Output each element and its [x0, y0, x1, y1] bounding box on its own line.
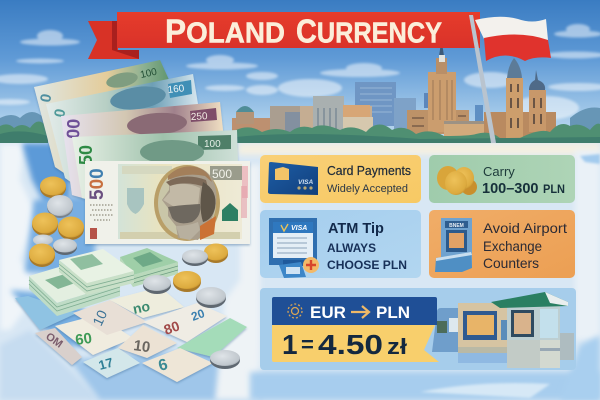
- icon: atm screen: [269, 218, 319, 278]
- note 160 teal: 0: [51, 108, 69, 119]
- panel: avoid airport exchange: [429, 210, 575, 278]
- building: church with towers: [484, 58, 556, 139]
- ribbon body: [117, 12, 480, 48]
- note: purple: OM: [43, 331, 65, 351]
- background: snowy ground: [0, 142, 600, 400]
- skyline: [0, 40, 600, 143]
- ribbon tail: [88, 21, 139, 59]
- shield emblem: [127, 188, 144, 214]
- note: blue ten: [73, 300, 147, 335]
- rate value: zł: [387, 334, 407, 359]
- text: carry: PLN: [543, 182, 565, 196]
- icon: exchange kiosk: BNEM: [449, 223, 464, 229]
- note: teal 17: 17: [97, 355, 115, 373]
- title: POLAND: [165, 12, 285, 50]
- text: avoid airport: Counters: [483, 255, 539, 271]
- panel: card payments: [260, 155, 421, 203]
- note 250 purple: 00: [63, 118, 84, 139]
- emblem green house: [222, 203, 238, 221]
- note: 80 20: [143, 303, 227, 342]
- banknote fan: [34, 60, 250, 244]
- right stack: [120, 248, 178, 287]
- arrow: [351, 306, 369, 318]
- title: CURRENCY: [296, 12, 442, 50]
- rate value: =: [301, 332, 314, 357]
- note: purple: [35, 328, 82, 365]
- title ribbon: [88, 12, 480, 59]
- text: carry: Carry: [483, 164, 515, 179]
- text: atm tip: ATM Tip: [328, 221, 384, 237]
- panel: atm tip: [260, 210, 421, 278]
- icon: sun emblem: [288, 304, 302, 318]
- note 100 green second: 50: [76, 145, 96, 165]
- icon: gold coins: [437, 166, 477, 195]
- note 160 teal: [46, 74, 198, 185]
- note: cream six: 6: [157, 356, 170, 375]
- flag cloth: [475, 17, 548, 41]
- trees: [0, 121, 600, 143]
- icon: atm screen: VISA: [291, 225, 307, 232]
- text: card payments: Card Payments: [327, 164, 411, 178]
- building: blue tower: [355, 82, 483, 132]
- note: green 60: [55, 315, 133, 355]
- text: avoid airport: Avoid Airport: [483, 220, 567, 236]
- clouds: [0, 24, 600, 120]
- cash stacks: [29, 248, 178, 316]
- text: atm tip: [327, 221, 407, 272]
- text: avoid airport: [483, 220, 567, 271]
- rate header: [272, 297, 437, 325]
- note: green 60: 60: [74, 330, 93, 349]
- flat banknotes: [15, 287, 247, 382]
- building: palace of culture: [407, 40, 484, 138]
- note: 80 20: 20: [189, 306, 207, 324]
- coins right: [143, 244, 240, 369]
- coins left: [29, 176, 84, 267]
- text: card payments: Widely Accepted: [327, 183, 408, 195]
- rate currencies: EUR: [310, 303, 346, 322]
- upper stack: [59, 249, 134, 295]
- note: teal 17: [83, 348, 140, 378]
- trees: far background: [0, 107, 600, 141]
- panel: carry cash: [429, 155, 575, 203]
- building: left block: [300, 96, 373, 136]
- icon: bank card: [268, 162, 318, 195]
- booth: green roof kiosk: [491, 292, 574, 368]
- panel: exchange rate: [260, 288, 576, 370]
- lower stack: [29, 267, 120, 316]
- note 100 green second: [72, 130, 238, 200]
- note: blue ten: 10: [89, 307, 110, 328]
- rate box: [272, 297, 439, 362]
- background: sky: [0, 0, 600, 145]
- flag: [469, 15, 551, 143]
- text: avoid airport: Exchange: [483, 238, 542, 254]
- note 100 green: 100: [139, 67, 158, 81]
- note 100 green: 0: [37, 93, 55, 104]
- text: carry: [482, 164, 565, 197]
- icon: exchange kiosk: [435, 218, 472, 272]
- note: green no: no: [131, 298, 151, 317]
- booth: atm: [432, 308, 458, 352]
- text: card payments: [327, 164, 411, 195]
- text: atm tip: ALWAYS: [327, 243, 376, 255]
- note 100 green: [34, 60, 180, 175]
- icon: bank card: VISA: [298, 179, 313, 186]
- title: [165, 12, 442, 50]
- flag pole: [469, 15, 496, 143]
- note: green strip: [177, 318, 247, 357]
- booth: tan: [458, 303, 507, 363]
- rate value: 1: [282, 329, 298, 360]
- exchange storefronts: [432, 292, 574, 368]
- rate value box: [272, 325, 439, 362]
- rate value: [282, 329, 407, 360]
- note: green no: [110, 287, 184, 318]
- note 500: 500: [212, 167, 232, 181]
- note: cream six: [142, 348, 213, 382]
- text: atm tip: CHOOSE PLN: [327, 260, 407, 272]
- note: red ten: [118, 325, 177, 358]
- note 250 purple: [61, 102, 223, 200]
- note 500: 500: [87, 168, 108, 200]
- text: carry: 100–300: [482, 181, 538, 197]
- rate value: 4.50: [318, 329, 383, 360]
- note: 80 20: 80: [162, 317, 182, 338]
- rate box: PLN: [376, 303, 410, 322]
- note: red ten: 10: [132, 337, 151, 356]
- portrait medallion: [154, 165, 220, 241]
- note 500: [85, 161, 250, 244]
- note 250 purple: 250: [191, 111, 208, 123]
- building: left dome hall: [232, 106, 300, 136]
- note 160 teal: 160: [167, 83, 185, 96]
- note 100 green second: 100: [204, 139, 221, 150]
